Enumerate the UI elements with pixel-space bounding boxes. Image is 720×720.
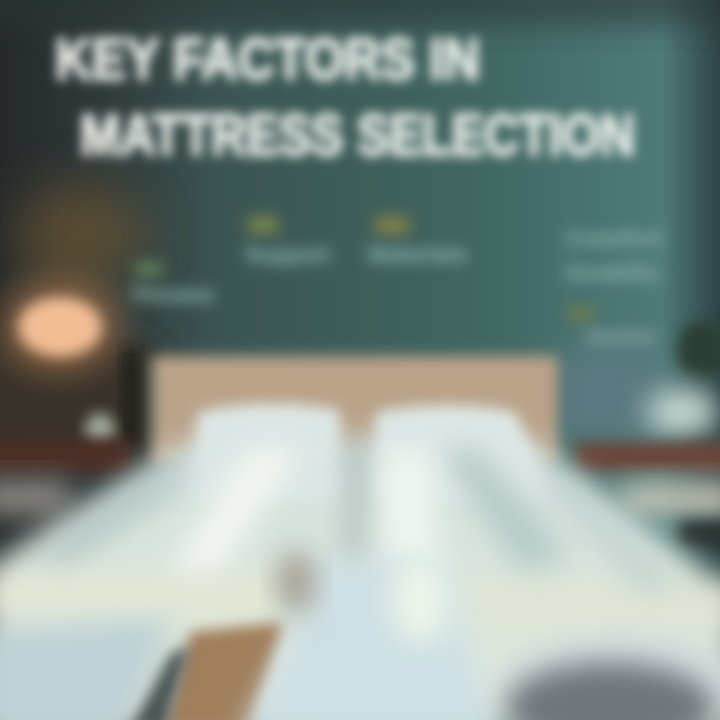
title [55, 27, 635, 168]
mattress and bedding [0, 440, 720, 720]
factor 3 [368, 216, 468, 267]
factor 1: Firmness [132, 282, 214, 307]
factor 1 [132, 262, 214, 307]
grey roll cushion [500, 633, 720, 720]
lamp [0, 273, 140, 447]
pillow left [190, 403, 342, 500]
fold shadow [276, 550, 316, 614]
factor labels [132, 216, 664, 348]
right wall object and plant [560, 322, 720, 440]
highlight [392, 558, 448, 642]
factor 3: Materials [368, 242, 468, 267]
factor 2: Support [245, 242, 331, 267]
wooden floor [165, 622, 285, 720]
factor 4: Durability [565, 260, 661, 285]
dark gap [130, 645, 190, 720]
bedding folds [30, 440, 680, 590]
nightstand right [575, 442, 720, 472]
factor 4: Comfort [565, 226, 664, 251]
centre blanket [240, 560, 510, 720]
side floor light [0, 480, 720, 548]
lower left sheet [0, 618, 175, 720]
title line 1: KEY FACTORS IN [55, 27, 480, 92]
nightstand left [0, 438, 130, 472]
pillow right [370, 405, 555, 500]
headboard [152, 356, 558, 466]
factor 4 [565, 226, 664, 348]
factor 2 [245, 216, 331, 267]
